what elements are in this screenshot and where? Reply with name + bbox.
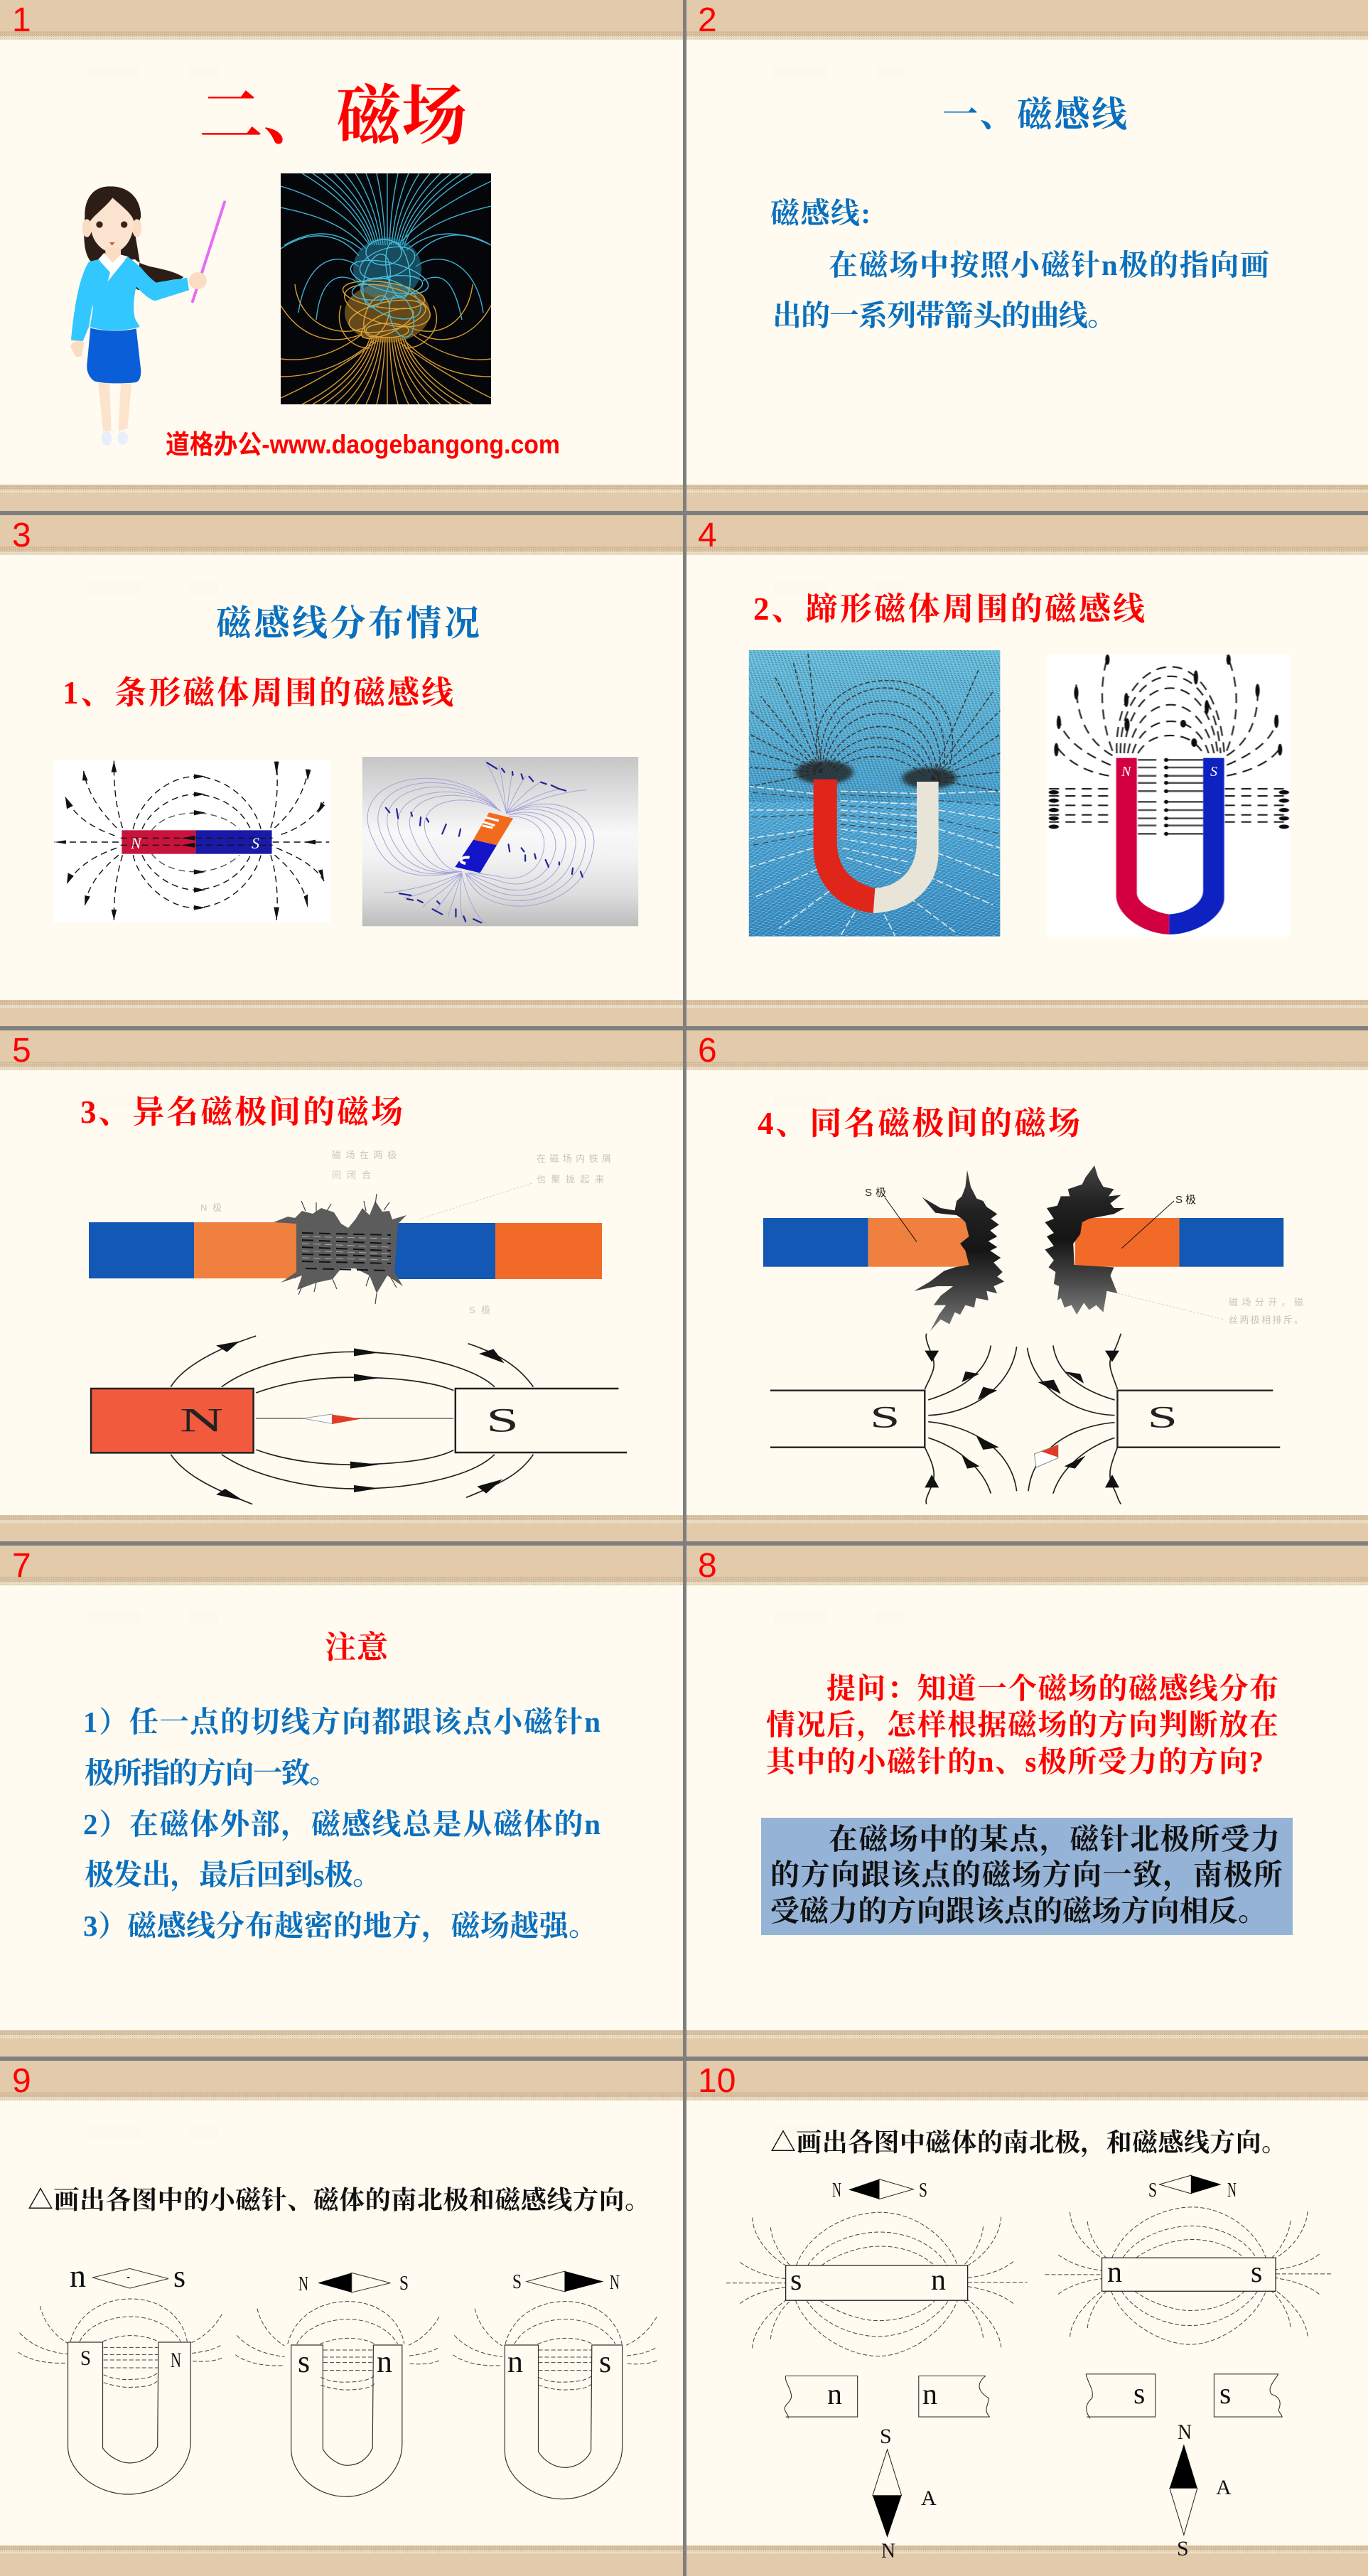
bar magnet A with compass and field lines: n bbox=[931, 2264, 946, 2297]
cut magnet pairs s-s: s bbox=[1219, 2378, 1231, 2410]
horseshoe magnet 3 with compass: n bbox=[507, 2344, 523, 2379]
heading: 磁感线分布情况 bbox=[216, 603, 480, 643]
bar magnet B with compass and field lines: s bbox=[1251, 2256, 1262, 2289]
bar magnet A with compass and field lines: N bbox=[832, 2179, 841, 2202]
numbered notes: 1）任一点的切线方向都跟该点小磁针n bbox=[83, 1705, 600, 1738]
photo: iron filings around horseshoe magnet bbox=[749, 650, 1000, 937]
horseshoe magnet 2 with compass: N bbox=[298, 2273, 308, 2295]
faint captions: 磁场在两极 bbox=[332, 1150, 397, 1160]
slide number 10: 10 bbox=[698, 2062, 736, 2100]
cut magnet pairs n-n: n bbox=[922, 2378, 937, 2411]
slide number 6: 6 bbox=[698, 1032, 717, 1069]
illustration: teacher with pointer bbox=[70, 186, 225, 446]
compass needle right: N bbox=[1178, 2420, 1192, 2444]
slide number 9: 9 bbox=[12, 2062, 31, 2100]
exercise instruction: △画出各图中的小磁针、磁体的南北极和磁感线方向。 bbox=[28, 2186, 650, 2214]
diagram: field between N and S poles bbox=[91, 1336, 627, 1504]
horseshoe magnet 3 with compass bbox=[453, 2271, 657, 2499]
magnet pole labels N S: N bbox=[130, 834, 142, 852]
horseshoe magnet 1 with compass: n bbox=[70, 2258, 86, 2294]
slide number 3: 3 bbox=[12, 517, 31, 554]
slide 3: bar magnet field bbox=[0, 515, 683, 1026]
definition text: 出的一系列带箭头的曲线。 bbox=[772, 299, 1116, 332]
faint captions: 在磁场内铁屑 bbox=[537, 1153, 611, 1164]
horseshoe magnet 2 with compass: S bbox=[399, 2273, 409, 2295]
compass needle left: A bbox=[921, 2486, 937, 2510]
magnet pole labels N S bbox=[130, 834, 259, 852]
compass needle left bbox=[873, 2425, 937, 2562]
slide number 1: 1 bbox=[12, 1, 31, 39]
horseshoe magnet 3 with compass: S bbox=[512, 2271, 522, 2293]
image: earth magnetic field lines bbox=[281, 173, 491, 404]
heading: 注意 bbox=[325, 1629, 389, 1665]
magnet pole labels N S: S bbox=[252, 834, 259, 852]
slide number 7: 7 bbox=[12, 1547, 31, 1585]
S pole leader labels: S极 bbox=[865, 1187, 886, 1199]
horseshoe magnet 2 with compass: n bbox=[377, 2344, 392, 2379]
faint captions: S极 bbox=[469, 1305, 490, 1315]
pole labels on horseshoe diagram: S bbox=[1210, 764, 1217, 780]
horseshoe magnet 1 with compass: N bbox=[171, 2349, 181, 2372]
numbered notes: 极所指的方向一致。 bbox=[85, 1757, 338, 1789]
bar magnet B with compass and field lines: n bbox=[1107, 2256, 1122, 2289]
faint caption bbox=[1229, 1297, 1303, 1325]
faint captions: N极 bbox=[200, 1202, 222, 1213]
cut magnet pairs n-n: n bbox=[827, 2378, 842, 2411]
horseshoe magnet 3 with compass: s bbox=[599, 2344, 611, 2379]
answer box: 在磁场中的某点，磁针北极所受力 bbox=[829, 1823, 1280, 1856]
slide 4: horseshoe magnet field bbox=[686, 515, 1368, 1026]
subheading: 1、条形磁体周围的磁感线 bbox=[63, 675, 453, 711]
horseshoe magnet 1 with compass bbox=[18, 2258, 222, 2494]
question text: 提问：知道一个磁场的磁感线分布 bbox=[826, 1672, 1278, 1705]
slide 1: title slide bbox=[0, 0, 683, 511]
diagram: field between N and S poles: N bbox=[180, 1402, 223, 1439]
slide 10: exercise bar magnets bbox=[686, 2061, 1368, 2576]
cut magnet pairs s-s: s bbox=[1133, 2378, 1145, 2410]
faint caption: 磁场分开，磁 bbox=[1229, 1297, 1303, 1308]
website watermark: 道格办公-www.daogebangong.com bbox=[166, 430, 560, 459]
pole labels on horseshoe diagram bbox=[1121, 764, 1217, 780]
image: 3D field around bar magnet bbox=[362, 757, 638, 926]
answer box: 的方向跟该点的磁场方向一致，南极所 bbox=[770, 1858, 1283, 1892]
slide 8: question and answer bbox=[686, 1546, 1368, 2057]
compass needle left: N bbox=[881, 2539, 895, 2562]
cut magnet pairs s-s bbox=[1086, 2374, 1283, 2418]
question text bbox=[766, 1672, 1278, 1778]
title bbox=[199, 80, 467, 153]
heading: 2、蹄形磁体周围的磁感线 bbox=[753, 591, 1145, 627]
bar magnet A with compass and field lines bbox=[726, 2179, 1027, 2356]
photo: bar magnets with iron filings, like poles bbox=[763, 1165, 1283, 1331]
slide number 8: 8 bbox=[698, 1547, 717, 1585]
diagram: field between N and S poles: S bbox=[486, 1402, 519, 1439]
definition text bbox=[772, 249, 1269, 332]
compass needle right: S bbox=[1177, 2537, 1189, 2560]
photo: bar magnets with iron filings, unlike poles bbox=[89, 1183, 602, 1304]
compass needle left: S bbox=[880, 2425, 892, 2448]
heading: 4、同名磁极间的磁场 bbox=[758, 1106, 1080, 1141]
slide 2: definition of field lines bbox=[686, 0, 1368, 511]
bar magnet A with compass and field lines: S bbox=[919, 2179, 927, 2202]
faint captions bbox=[200, 1150, 611, 1315]
slide 5: opposite poles bbox=[0, 1030, 683, 1541]
heading: 3、异名磁极间的磁场 bbox=[80, 1094, 403, 1130]
faint captions: 也聚拢起来 bbox=[537, 1174, 604, 1185]
slide 9: exercise horseshoe magnets bbox=[0, 2061, 683, 2576]
question text: 其中的小磁针的n、s极所受力的方向? bbox=[766, 1745, 1264, 1778]
compass needle right bbox=[1170, 2420, 1232, 2560]
pole labels on horseshoe diagram: N bbox=[1121, 764, 1132, 780]
faint captions: 间闭合 bbox=[332, 1170, 371, 1180]
diagram: horseshoe magnet field lines bbox=[1047, 654, 1291, 937]
horseshoe magnet 3 with compass: N bbox=[610, 2272, 620, 2294]
diagram: bar magnet field lines bbox=[53, 760, 330, 922]
bar magnet B with compass and field lines bbox=[1045, 2175, 1332, 2344]
cut magnet pairs n-n bbox=[785, 2376, 990, 2418]
S pole leader labels: S极 bbox=[1175, 1194, 1196, 1206]
slide number 2: 2 bbox=[698, 1, 717, 39]
answer box bbox=[761, 1818, 1293, 1935]
bar magnet B with compass and field lines: S bbox=[1148, 2179, 1157, 2202]
numbered notes: 极发出，最后回到s极。 bbox=[85, 1858, 382, 1892]
diagram: field between two S poles bbox=[770, 1334, 1280, 1504]
slide number 5: 5 bbox=[12, 1032, 31, 1069]
horseshoe magnet 2 with compass: s bbox=[298, 2344, 310, 2379]
slide number 4: 4 bbox=[698, 517, 717, 554]
bar magnet B with compass and field lines: N bbox=[1227, 2179, 1237, 2202]
slide 6: like poles bbox=[686, 1030, 1368, 1541]
numbered notes: 2）在磁体外部，磁感线总是从磁体的n bbox=[83, 1808, 600, 1841]
heading: 一、磁感线 bbox=[942, 95, 1127, 134]
bar magnet A with compass and field lines: s bbox=[790, 2264, 802, 2297]
title: 二、 bbox=[199, 82, 327, 153]
diagram: field between two S poles: S bbox=[870, 1400, 900, 1434]
answer box: 受磁力的方向跟该点的磁场方向相反。 bbox=[770, 1895, 1267, 1927]
numbered notes bbox=[83, 1705, 600, 1943]
horseshoe magnet 1 with compass: s bbox=[173, 2259, 185, 2294]
question text: 情况后，怎样根据磁场的方向判断放在 bbox=[766, 1708, 1278, 1742]
horseshoe magnet 2 with compass bbox=[235, 2273, 439, 2496]
title: 磁场 bbox=[336, 80, 467, 153]
horseshoe magnet 1 with compass: S bbox=[80, 2346, 91, 2370]
definition text: 在磁场中按照小磁针n极的指向画 bbox=[829, 249, 1269, 281]
definition label: 磁感线: bbox=[770, 197, 871, 230]
faint caption: 丝两极相排斥。 bbox=[1229, 1315, 1303, 1325]
compass needle right: A bbox=[1216, 2476, 1232, 2499]
exercise instruction: △画出各图中磁体的南北极，和磁感线方向。 bbox=[770, 2128, 1287, 2157]
S pole leader labels bbox=[865, 1187, 1196, 1206]
slide 7: notes bbox=[0, 1546, 683, 2057]
numbered notes: 3）磁感线分布越密的地方，磁场越强。 bbox=[83, 1909, 598, 1943]
diagram: field between two S poles: S bbox=[1148, 1400, 1178, 1434]
